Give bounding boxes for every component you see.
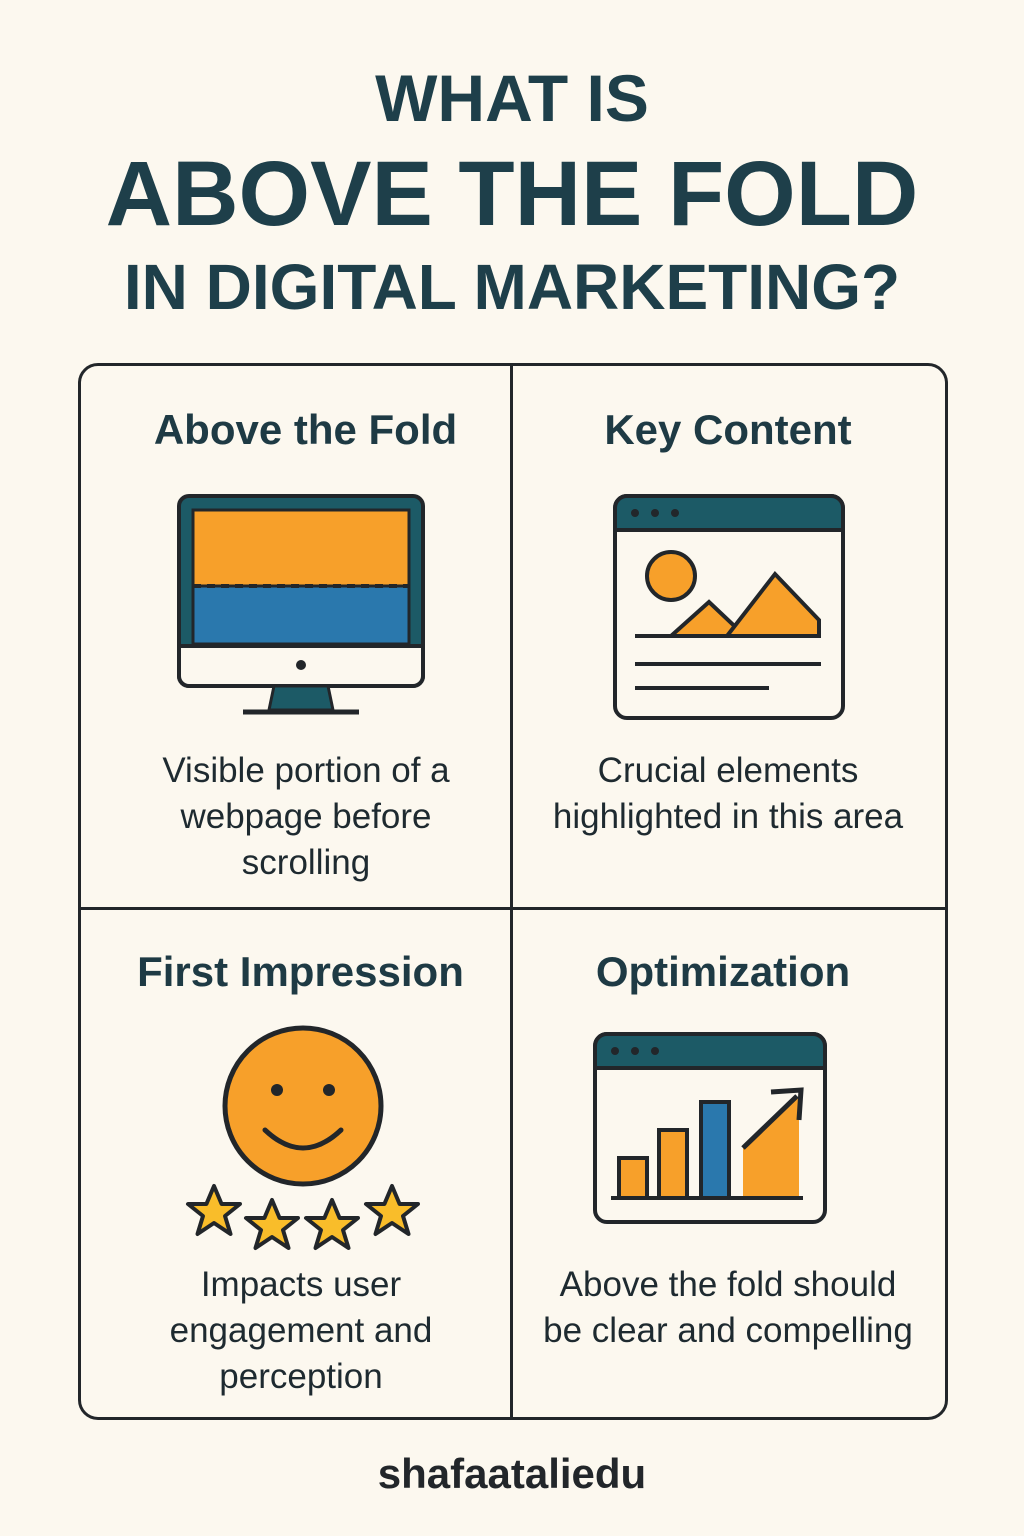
title line 3: IN DIGITAL MARKETING? — [124, 251, 900, 323]
footer: shafaataliedu — [378, 1450, 646, 1497]
heading: Above the Fold — [154, 406, 457, 453]
panel: above the fold — [154, 406, 457, 882]
description: Impacts user engagement and perception — [170, 1265, 432, 1396]
description: be clear and compelling — [543, 1311, 913, 1350]
icon: smiley with stars — [186, 1026, 420, 1250]
panel: first impression — [137, 948, 464, 1396]
heading: First Impression — [137, 948, 464, 995]
panel: optimization — [543, 948, 913, 1350]
grid frame — [78, 363, 948, 1420]
icon: browser image — [613, 494, 845, 720]
icon: monitor — [177, 494, 425, 714]
icon: growth chart browser — [593, 1032, 827, 1224]
title line 2: ABOVE THE FOLD — [106, 143, 918, 245]
title — [106, 61, 918, 323]
panel: key content — [553, 406, 904, 836]
heading: Optimization — [596, 948, 850, 995]
description: Visible portion of a webpage before scrolling — [162, 751, 450, 882]
description — [543, 1265, 913, 1350]
description: Crucial elements highlighted in this area — [553, 751, 903, 836]
heading: Key Content — [604, 406, 852, 453]
title line 1: WHAT IS — [375, 61, 649, 135]
description: Above the fold should — [560, 1265, 896, 1304]
